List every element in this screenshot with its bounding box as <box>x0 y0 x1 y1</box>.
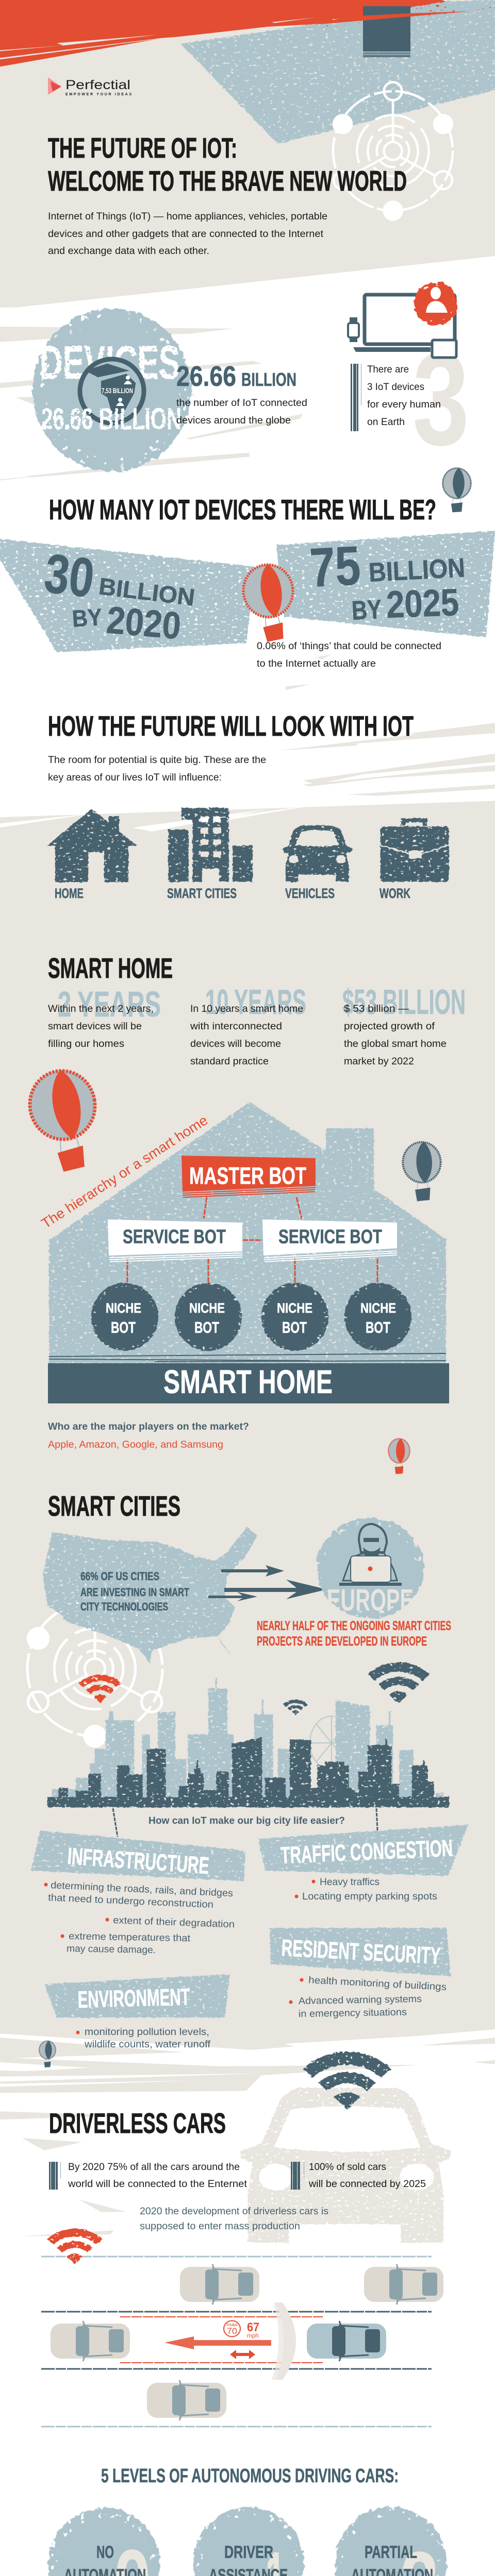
current speed: mph <box>247 2333 259 2339</box>
level 0: NO <box>96 2543 114 2562</box>
panel: traffic congestion <box>258 1825 468 1902</box>
future intro text <box>48 755 266 783</box>
icon: network <box>333 82 453 219</box>
smart home stat: 53 billion: $ 53 billion — <box>344 1004 409 1014</box>
icon: vehicle: VEHICLES <box>285 886 335 901</box>
heading: smart cities: SMART CITIES <box>48 1490 180 1522</box>
blue textured shape <box>180 0 495 144</box>
smart home stat: 2 years: smart devices will be <box>48 1021 142 1032</box>
house shape <box>49 1102 446 1363</box>
distance arrow <box>164 2336 271 2349</box>
map: united states <box>43 1527 257 1664</box>
service bot right: SERVICE BOT <box>278 1226 382 1248</box>
panel: 30 billion: 30 <box>41 542 97 609</box>
panel: 30 billion: 2020 <box>105 598 183 647</box>
speed limit: 70 <box>227 2326 237 2336</box>
service bot right <box>262 1219 397 1262</box>
niche bots <box>91 1283 411 1351</box>
panel: traffic congestion: Locating empty parking spots <box>302 1891 437 1902</box>
niche bots: BOT <box>111 1318 136 1336</box>
smart home stat: 53 billion: market by 2022 <box>344 1056 414 1067</box>
market players: Who are the major players on the market? <box>48 1421 249 1432</box>
panel: 30 billion <box>0 539 255 652</box>
panel: smart home hierarchy <box>39 1102 449 1403</box>
icon: smart cities <box>167 808 253 901</box>
panel: traffic congestion: Heavy traffics <box>320 1877 380 1888</box>
icon: balloon dark right <box>401 1141 443 1201</box>
ghost numeral 3: 3 <box>412 326 469 473</box>
city question: How can IoT make our big city life easier? <box>148 1816 345 1826</box>
stat: three devices per human <box>351 364 441 431</box>
panel: 75 billion: BILLION <box>368 553 466 588</box>
panel: europe <box>257 1518 451 1649</box>
panel: environment: ENVIRONMENT <box>77 1983 190 2013</box>
panel: infrastructure: INFRASTRUCTURE <box>67 1842 210 1879</box>
smart home stat: 10 years: 10 YEARS <box>205 982 306 1022</box>
ferris wheel <box>310 1716 353 1770</box>
panel: resident security: Advanced warning systems <box>299 1994 422 2007</box>
smart home stat: 53 billion: the global smart home <box>344 1039 447 1049</box>
traffic cars <box>51 2264 443 2420</box>
stat: three devices per human: 3 IoT devices <box>367 382 424 393</box>
smart home stat: 10 years: devices will become <box>190 1039 281 1049</box>
stat: sold cars 2025: 100% of sold cars <box>309 2162 386 2173</box>
dark buildings <box>47 1738 449 1807</box>
smart home stat: 10 years: standard practice <box>190 1056 269 1067</box>
heading: smart home: SMART HOME <box>48 952 173 984</box>
stat: three devices per human: on Earth <box>367 417 405 428</box>
niche bots: NICHE <box>189 1300 225 1316</box>
level 2 <box>335 2507 447 2576</box>
panel: environment: wildlife counts, water runoff <box>84 2039 211 2050</box>
logo: Perfectial <box>65 78 130 92</box>
icon: balloon tiny dark <box>39 2041 56 2067</box>
stat: sold cars 2025 <box>291 2162 426 2190</box>
panel: 75 billion <box>276 531 495 637</box>
icon: wifi dark large <box>368 1663 430 1703</box>
stat: sold cars 2025: will be connected by 2025 <box>308 2179 426 2190</box>
speed limit <box>224 2320 240 2337</box>
panel: infrastructure: extreme temperatures that <box>69 1931 191 1944</box>
market players: Apple, Amazon, Google, and Samsung <box>48 1439 223 1450</box>
smart home stat: 53 billion: projected growth of <box>344 1021 435 1032</box>
icon: wifi red on road <box>47 2229 102 2264</box>
ghost number: 26.66 BILLION <box>41 402 182 436</box>
heading: driverless cars: DRIVERLESS CARS <box>49 2107 226 2139</box>
hierarchy label: The hierarchy or a smart home <box>39 1112 210 1231</box>
title: THE FUTURE OF IOT: <box>48 132 237 164</box>
niche bots: BOT <box>366 1318 390 1336</box>
level 0 <box>48 2508 160 2576</box>
stamp circle <box>32 309 191 471</box>
icon: network lower <box>27 1591 162 1747</box>
smart home floor: SMART HOME <box>163 1363 333 1400</box>
panel: devices count <box>32 309 307 471</box>
stat caption <box>176 398 307 426</box>
gap arrow <box>230 2350 255 2359</box>
dark hanging banner <box>363 6 410 57</box>
panel: infrastructure: that need to undergo reconstruction <box>48 1892 213 1910</box>
niche bots: BOT <box>282 1318 307 1336</box>
map: united states: 66% OF US CITIES <box>80 1570 159 1583</box>
stat: three devices per human: There are <box>367 364 409 375</box>
icon: balloon dark <box>442 468 471 512</box>
europe caption <box>257 1619 451 1649</box>
logo: EMPOWER YOUR IDEAS <box>65 93 131 96</box>
icon: home <box>47 809 137 901</box>
smart home stat: 10 years <box>190 982 306 1067</box>
panel: 30 billion: BY <box>71 603 103 632</box>
smart home stat: 2 years: Within the next 2 years, <box>48 1004 154 1014</box>
road diagram <box>41 2257 443 2427</box>
skyline <box>47 1678 449 1807</box>
light buildings <box>52 1678 443 1807</box>
current speed <box>247 2320 259 2339</box>
stat unit: BILLION <box>241 369 296 390</box>
panel: infrastructure: extent of their degradation <box>113 1915 235 1930</box>
niche bots: NICHE <box>360 1300 396 1316</box>
ghost word devices: DEVICES <box>40 336 180 389</box>
word europe: EUROPE <box>327 1583 414 1617</box>
speed limit: max <box>226 2322 238 2327</box>
smart home stat: 2 years: filling our homes <box>48 1039 124 1049</box>
panel: 75 billion: 75 <box>308 534 362 599</box>
stat: cars connected 2020 <box>49 2162 248 2190</box>
smart home stat: 10 years: with interconnected <box>190 1021 282 1032</box>
panel: resident security <box>270 1928 451 2020</box>
stat text: connected things: to the Internet actually are <box>257 658 376 669</box>
stat text: connected things <box>257 641 441 669</box>
current speed: 67 <box>247 2320 259 2334</box>
lane lines <box>41 2257 432 2427</box>
intro text: Internet of Things (IoT) — home appliances, vehicles, portable <box>48 211 327 222</box>
mass production text <box>140 2206 328 2232</box>
panel: 75 billion: BY <box>351 595 383 626</box>
level 2: PARTIAL <box>365 2543 417 2562</box>
icon: wifi red <box>78 1675 122 1703</box>
niche bots: NICHE <box>106 1300 141 1316</box>
smart home stat: 2 years <box>48 984 161 1049</box>
stat: cars connected 2020: By 2020 75% of all the cars around the <box>68 2162 240 2173</box>
stat: cars connected 2020: world will be connected to the Enternet <box>68 2179 248 2190</box>
icon: smart cities: SMART CITIES <box>167 886 237 901</box>
service bot left <box>108 1219 242 1262</box>
niche bots: BOT <box>194 1318 219 1336</box>
map: united states: ARE INVESTING IN SMART <box>80 1586 189 1599</box>
mass production text: 2020 the development of driverless cars is <box>140 2206 328 2217</box>
icon: home: HOME <box>55 886 84 901</box>
icon: big car background <box>240 2088 451 2243</box>
panel: 30 billion: BILLION <box>97 572 196 611</box>
stat figure: 26.66 <box>176 360 236 392</box>
connectors from skyline <box>113 1808 377 1837</box>
arrows to europe <box>208 1565 327 1601</box>
red lane guides <box>120 2317 323 2363</box>
top red brush tip over banner <box>316 11 470 25</box>
panel: resident security: health monitoring of buildings <box>308 1975 447 1993</box>
future intro text: The room for potential is quite big. These are the <box>48 755 266 766</box>
icon: globe <box>80 359 144 423</box>
logo <box>48 77 131 96</box>
connectors <box>127 1197 377 1282</box>
intro text: and exchange data with each other. <box>48 246 209 257</box>
top red brush band <box>0 0 495 66</box>
service bot left: SERVICE BOT <box>123 1226 226 1248</box>
levels stamps <box>47 2507 448 2576</box>
intro text: devices and other gadgets that are connected to the Internet <box>48 229 324 240</box>
panel: infrastructure: may cause damage. <box>67 1943 156 1956</box>
smart home stat: 53 billion <box>342 982 466 1067</box>
master bot box <box>182 1156 316 1197</box>
icon: globe: 7,53 BILLION <box>102 386 133 395</box>
panel: 75 billion: 2025 <box>386 581 459 626</box>
icon: balloon red <box>239 561 301 645</box>
panel: environment: monitoring pollution levels, <box>85 2027 209 2038</box>
panel: infrastructure <box>31 1831 245 1956</box>
mass production text: supposed to enter mass production <box>140 2221 300 2232</box>
radar beam <box>272 2302 296 2380</box>
panel: resident security: in emergency situations <box>299 2007 407 2020</box>
panel: environment <box>44 1974 230 2050</box>
map: united states: CITY TECHNOLOGIES <box>80 1600 168 1613</box>
master bot box: MASTER BOT <box>189 1162 306 1189</box>
icon: balloon small red <box>388 1438 410 1474</box>
future intro text: key areas of our lives IoT will influence: <box>48 772 222 783</box>
smart home stat: 10 years: In 10 years a smart home <box>190 1004 303 1014</box>
icon: briefcase: WORK <box>380 886 410 901</box>
icon: vehicle <box>282 825 353 901</box>
niche bots: NICHE <box>277 1300 312 1316</box>
icon: devices with person <box>348 282 457 358</box>
smart home stat: 2 years: 2 YEARS <box>58 984 161 1024</box>
stat caption: the number of IoT connected <box>176 398 307 409</box>
intro text <box>48 211 327 257</box>
icon: hacker with laptop <box>339 1524 402 1586</box>
icon: balloon large red <box>23 1065 107 1176</box>
autonomous car <box>307 2321 386 2361</box>
title <box>48 132 407 197</box>
stat text: connected things: 0.06% of ‘things’ that could be connected <box>257 641 441 652</box>
stat: three devices per human: for every human <box>367 399 441 410</box>
panel: infrastructure: determining the roads, rails, and bridges <box>51 1880 233 1899</box>
level 1 <box>193 2507 304 2576</box>
stat caption: devices around the globe <box>176 415 291 426</box>
smart home floor <box>48 1353 449 1403</box>
market players <box>48 1421 249 1450</box>
level 1: DRIVER <box>224 2543 273 2562</box>
icon: wifi dark small <box>284 1700 307 1715</box>
icon: briefcase <box>380 818 449 901</box>
icon: wifi above car <box>303 2052 391 2109</box>
